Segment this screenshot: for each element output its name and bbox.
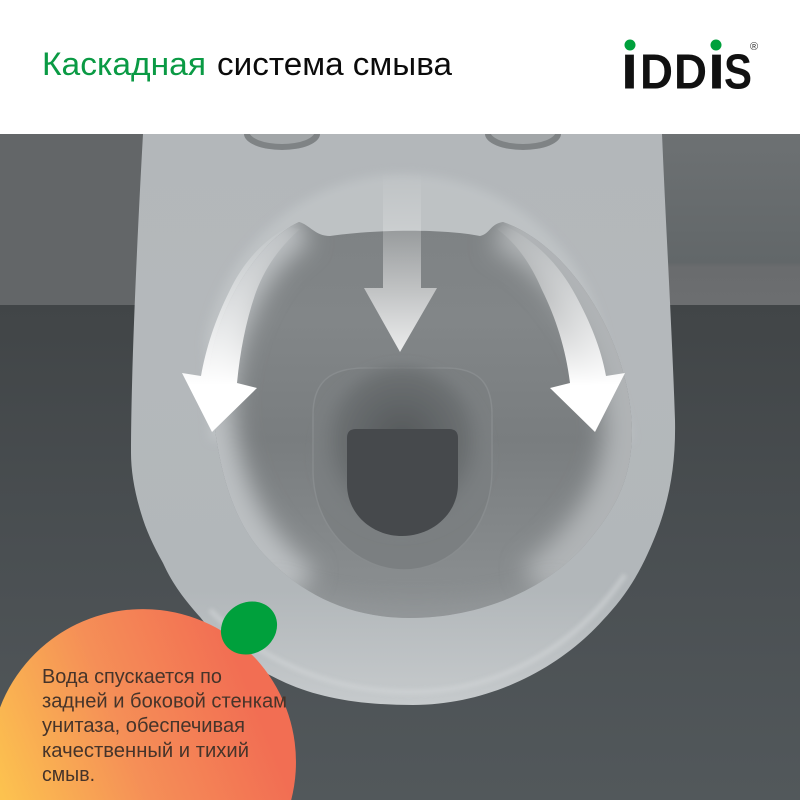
logo green dots (624, 40, 722, 50)
IDDIS logo: D (640, 46, 673, 100)
trap surround (313, 368, 492, 570)
arrow: centre (364, 211, 437, 352)
seat mount left (244, 134, 320, 150)
description text: качественный и тихий (42, 740, 249, 762)
left wall sheen (210, 222, 300, 590)
seat mount right (485, 134, 561, 150)
toilet photo illustration (131, 118, 675, 705)
IDDIS logo: I (621, 46, 638, 100)
IDDIS logo: I (708, 46, 725, 100)
arrow: left (182, 240, 288, 432)
description text: унитаза, обеспечивая (42, 715, 245, 737)
inner bowl (209, 222, 632, 630)
toilet ceramic body (131, 134, 675, 705)
description text: задней и боковой стенкам (42, 690, 287, 712)
lower rim highlight (210, 575, 626, 674)
trap opening (347, 429, 458, 536)
IDDIS logo: D (674, 46, 707, 100)
right wall sheen (503, 222, 632, 590)
bottom sheen (270, 580, 560, 630)
orange circle callout background (0, 609, 296, 800)
IDDIS logo (621, 40, 758, 100)
trap gradient (330, 367, 474, 488)
description text: Вода спускается по (42, 666, 222, 688)
description text: смыв. (42, 764, 95, 786)
registered mark: ® (750, 41, 758, 53)
title: система смыва (217, 46, 452, 82)
rim glow (208, 176, 584, 435)
title: Каскадная (42, 46, 206, 82)
green accent ellipse (211, 591, 287, 665)
arrow: right (508, 237, 625, 432)
IDDIS logo: S (724, 46, 752, 100)
